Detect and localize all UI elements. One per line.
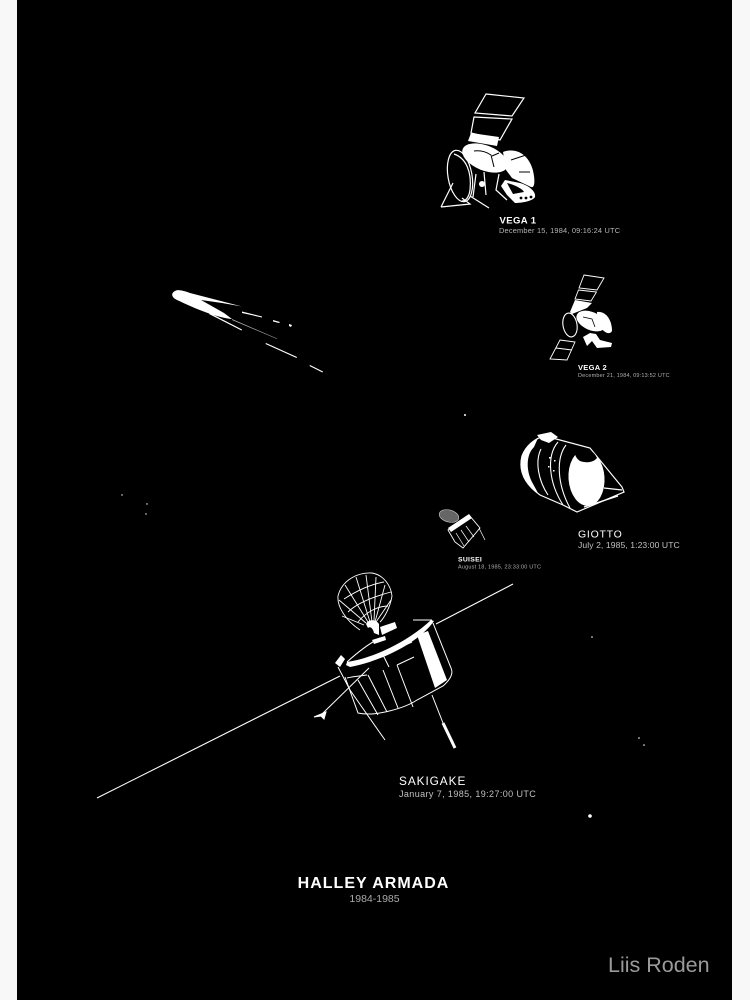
label: Sakigake: SAKIGAKE bbox=[399, 774, 466, 788]
label: Sakigake bbox=[399, 774, 536, 799]
label: Suisei: August 18, 1985, 23:33:00 UTC bbox=[458, 564, 541, 570]
Vega 1 solar panels bbox=[471, 94, 524, 140]
label: Giotto: GIOTTO bbox=[578, 528, 623, 540]
Giotto antenna mount bbox=[537, 432, 558, 443]
label: Suisei bbox=[458, 556, 541, 570]
Vega 2 lower solar panel bbox=[550, 340, 575, 360]
label: Vega 2: December 21, 1984, 09:13:52 UTC bbox=[578, 373, 670, 379]
Giotto dark cap bbox=[575, 449, 597, 462]
spacecraft: Sakigake bbox=[97, 573, 513, 798]
Sakigake lower boom bbox=[432, 695, 455, 748]
spacecraft: Giotto bbox=[521, 432, 624, 512]
Vega 2 drum bbox=[597, 312, 612, 333]
Sakigake rim bracket bbox=[335, 655, 345, 667]
spacecraft: Suisei bbox=[438, 508, 485, 548]
Sakigake antenna base bbox=[372, 636, 386, 644]
Vega 1 right drum bbox=[503, 150, 534, 187]
Vega 1 instrument ball bbox=[479, 181, 485, 187]
label: Giotto: July 2, 1985, 1:23:00 UTC bbox=[578, 540, 680, 550]
comet bbox=[172, 290, 323, 372]
Vega 2 upper solar panels bbox=[575, 275, 604, 301]
stars bbox=[121, 414, 645, 818]
Vega 2 dish bbox=[573, 306, 609, 336]
title bbox=[298, 875, 449, 905]
Sakigake feed horn bbox=[366, 620, 379, 635]
Vega 2 ring bbox=[561, 312, 579, 338]
Vega 1 main dish bbox=[458, 137, 512, 179]
Vega 2 panel yoke bbox=[570, 300, 592, 314]
Suisei dish bbox=[438, 508, 460, 524]
spacecraft: Vega 1 bbox=[441, 94, 535, 208]
label: Vega 1 bbox=[499, 216, 621, 235]
Sakigake long antenna boom bbox=[97, 584, 513, 798]
label: Suisei: SUISEI bbox=[458, 556, 482, 564]
label: Sakigake: January 7, 1985, 19:27:00 UTC bbox=[399, 789, 536, 799]
Giotto rear rim bbox=[521, 438, 538, 493]
Vega 1 panel yoke bbox=[468, 133, 499, 146]
Sakigake dish with ribs bbox=[338, 573, 392, 630]
label: Giotto bbox=[578, 528, 680, 550]
Sakigake instrument box bbox=[380, 622, 397, 635]
Giotto band markers bbox=[548, 457, 556, 472]
Vega 1 left ring and truss bbox=[441, 148, 507, 208]
Vega 1 lower cylinder bbox=[501, 180, 535, 203]
Sakigake arrow antenna bbox=[314, 668, 369, 719]
Giotto middle band bbox=[538, 442, 570, 508]
Suisei top rim bbox=[448, 514, 472, 532]
Sakigake top rim bbox=[346, 620, 434, 667]
Giotto outer shell bbox=[521, 436, 624, 512]
Giotto forward cone struts bbox=[584, 488, 622, 507]
title: HALLEY ARMADA bbox=[298, 875, 449, 892]
title: 1984-1985 bbox=[349, 893, 400, 905]
Suisei hull lines bbox=[456, 526, 485, 546]
spacecraft: Vega 2 bbox=[550, 275, 612, 360]
Giotto white hemisphere bbox=[567, 449, 606, 507]
Sakigake drum hull lines bbox=[338, 620, 452, 740]
label: Vega 1: December 15, 1984, 09:16:24 UTC bbox=[499, 226, 621, 235]
label: Vega 1: VEGA 1 bbox=[500, 216, 537, 226]
artist credit: Liis Roden bbox=[608, 953, 710, 977]
label: Vega 2: VEGA 2 bbox=[578, 363, 607, 372]
Suisei body bbox=[448, 515, 480, 548]
label: Vega 2 bbox=[578, 363, 670, 379]
Vega 2 lower body bbox=[583, 333, 612, 348]
Sakigake white stripe bbox=[417, 631, 447, 688]
